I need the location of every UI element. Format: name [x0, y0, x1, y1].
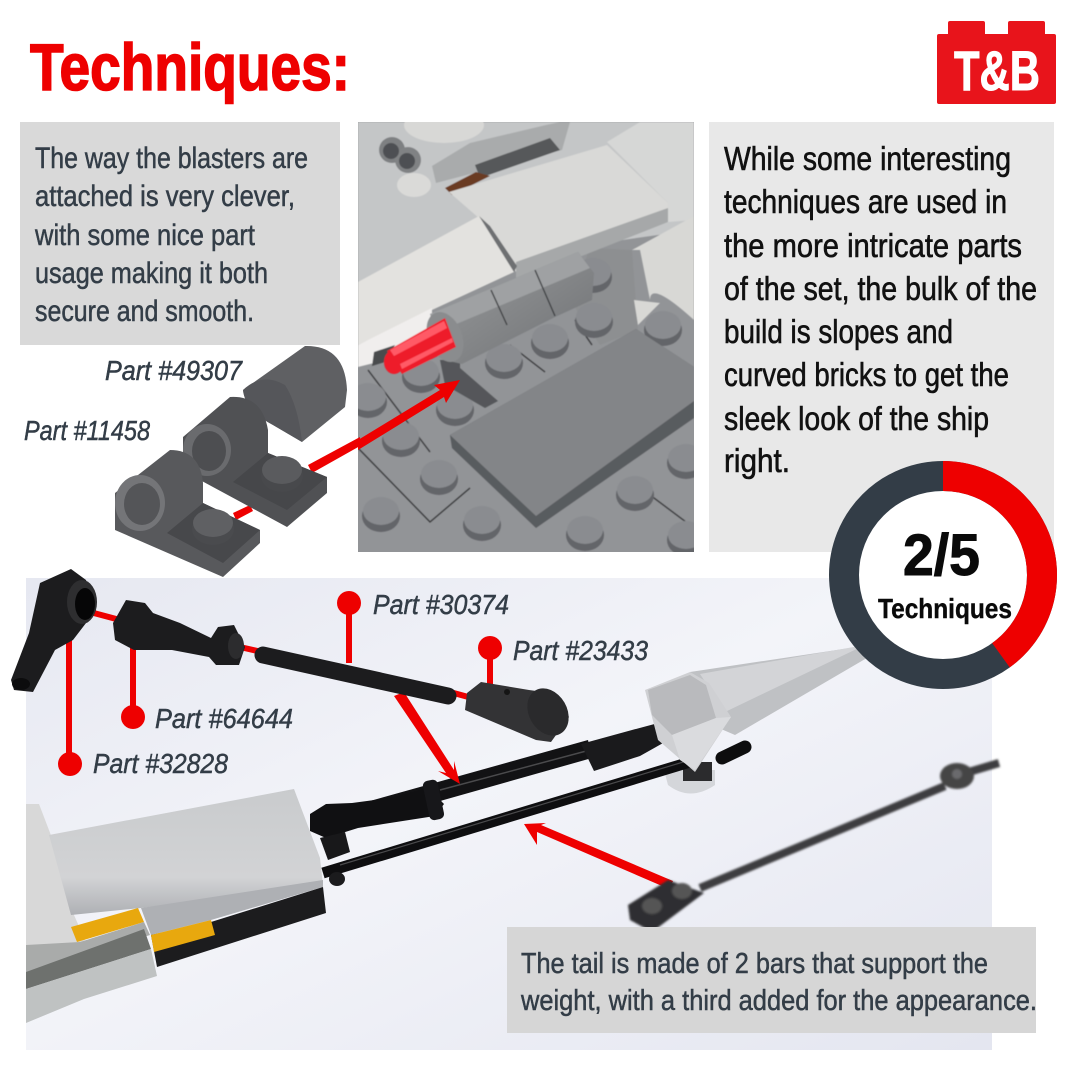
part labels: Part #64644	[155, 703, 293, 734]
panel: bulk text: right.	[724, 442, 790, 479]
upper part 11458	[183, 397, 327, 527]
middle slope	[449, 145, 668, 272]
part labels: Part #30374	[373, 589, 509, 620]
panel: blaster text: The way the blasters are	[35, 142, 308, 175]
right curved slope	[632, 216, 694, 320]
panel: bulk text: sleek look of the ship	[724, 400, 989, 437]
short rear bar	[722, 747, 745, 758]
rear plate behind hinge	[570, 248, 638, 345]
lower bar	[323, 762, 690, 873]
logo: T&B brick: T&B	[954, 39, 1040, 102]
leader: 64644	[121, 645, 145, 729]
upper background slope	[358, 122, 694, 290]
panel: bulk text	[709, 122, 1054, 552]
photo: blaster attachment close-up	[349, 107, 705, 556]
panel: blaster text: secure and smooth.	[35, 295, 254, 328]
studs	[358, 384, 388, 418]
part 64644	[113, 600, 245, 665]
tile	[450, 401, 694, 528]
hinge cylinder	[430, 269, 594, 364]
upper connector	[584, 724, 662, 771]
part labels	[24, 355, 648, 779]
body	[26, 804, 85, 945]
panel: bulk text: curved bricks to get the	[724, 356, 1009, 393]
title: Techniques:	[30, 30, 350, 104]
part labels: Part #32828	[93, 748, 228, 779]
part labels: Part #23433	[513, 635, 648, 666]
upper bar	[372, 740, 588, 801]
panel: blaster text: with some nice part	[34, 219, 256, 252]
panel: bulk text: build is slopes and	[724, 313, 953, 350]
part 32828	[11, 569, 97, 692]
plate grid	[358, 320, 694, 528]
panel: bulk text: the more intricate parts	[724, 227, 1022, 264]
panel: bulk text: techniques are used in	[724, 183, 1007, 220]
rear connector	[310, 800, 444, 837]
part labels: Part #11458	[24, 415, 150, 446]
red pin	[384, 318, 456, 374]
red arrow from part to tail	[394, 692, 460, 784]
detached bar	[628, 763, 999, 932]
photo: tail section	[26, 578, 992, 1050]
far right slope	[607, 122, 694, 222]
leader: 32828	[58, 635, 82, 776]
panel: blaster text: attached is very clever,	[35, 180, 295, 213]
red axis segments	[90, 612, 472, 698]
hub block	[645, 672, 731, 772]
leader: 23433	[478, 636, 502, 684]
part 23433	[465, 681, 577, 743]
part 30374	[263, 655, 448, 696]
exploded parts and callout lines	[11, 569, 577, 776]
part labels: Part #49307	[105, 355, 243, 386]
part renders: 49307 and 11458	[115, 346, 360, 577]
panel: blaster text	[20, 122, 340, 345]
large front slab	[358, 216, 514, 345]
red arrow	[358, 380, 460, 450]
donut: 2/5 techniques: Techniques	[878, 593, 1012, 624]
hub stud	[664, 770, 715, 794]
panel: bulk text: While some interesting	[724, 140, 1011, 177]
panel: blaster text: usage making it both	[35, 257, 268, 290]
part 49307	[243, 346, 347, 442]
panel: bulk text: of the set, the bulk of the	[724, 270, 1037, 307]
panel: tail text	[507, 927, 1037, 1033]
hub wedge	[690, 645, 872, 735]
donut: 2/5 techniques: 2/5	[903, 523, 980, 588]
step and shadow under hinge	[440, 360, 498, 408]
lower part 11458	[115, 450, 260, 577]
leader: 30374	[337, 591, 361, 663]
red guide line	[308, 437, 360, 473]
logo: T&B brick	[937, 21, 1056, 104]
machinery	[378, 122, 570, 197]
red arrow to tail bar	[524, 823, 673, 889]
donut: 2/5 techniques	[829, 461, 1057, 689]
panel: tail text: The tail is made of 2 bars that support the	[521, 948, 988, 980]
